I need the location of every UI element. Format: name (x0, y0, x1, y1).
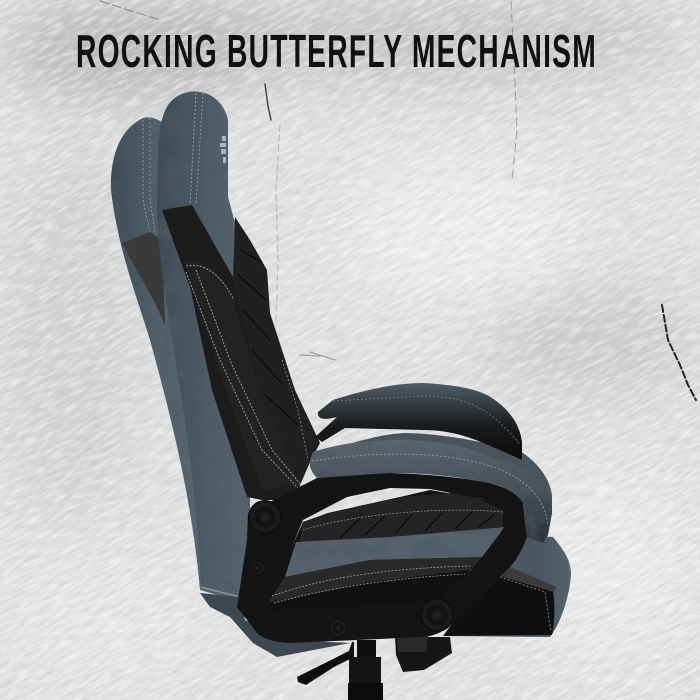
logo on headrest (220, 136, 226, 163)
far inner backrest (232, 217, 320, 490)
wall cracks (100, 1, 696, 400)
main backrest grey shell (157, 92, 300, 597)
chair base: gas cylinder (348, 640, 383, 700)
black side insert (162, 205, 318, 500)
far side seat edge (345, 433, 552, 515)
pivot bolts (248, 500, 454, 637)
under-seat shell (200, 593, 350, 657)
seat top mesh band (300, 492, 503, 542)
right seat cushion (443, 535, 571, 637)
tension knob (395, 636, 452, 672)
seat through arm opening (268, 490, 510, 614)
arm frame (237, 473, 527, 643)
height lever (297, 642, 354, 685)
seat black side (268, 570, 470, 614)
near armrest pad (310, 440, 552, 543)
rear backrest (111, 117, 235, 600)
seat underlay (268, 490, 510, 612)
office chair, side view (111, 92, 571, 700)
seat mesh strip (268, 557, 482, 603)
seat grey band (285, 527, 505, 577)
far armrest (315, 383, 522, 460)
